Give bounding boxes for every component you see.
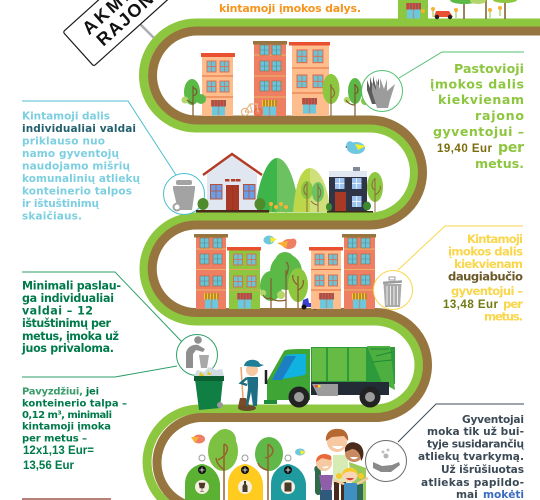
text: variable fee per apartment resident: gyventojui –	[451, 284, 523, 298]
garbage truck	[264, 346, 395, 408]
text: fixed fee per resident: metus.	[475, 156, 524, 171]
icon: gloves	[362, 70, 402, 112]
row 2: dark house	[326, 167, 373, 212]
text: example calculation: 13,56 Eur	[23, 460, 75, 472]
text: variable fee for individual household: komunalinių atliekų	[22, 173, 141, 185]
row 2: white house	[196, 154, 269, 212]
text: variable fee per apartment resident: per	[503, 297, 523, 311]
text: minimal service: ištuštinimų per	[22, 317, 112, 330]
text: residents pay for household waste only: Gyventojai	[462, 414, 524, 426]
text: fixed fee per resident: per	[498, 140, 524, 156]
text: minimal service	[21, 280, 121, 355]
text: variable fee for individual household: individualiai valdai	[22, 123, 136, 135]
recycling bin: green, glass	[185, 455, 220, 500]
row 1 buildings	[201, 41, 330, 116]
text: variable fee for individual household: konteinerio talpos	[22, 186, 132, 198]
row 1 trees	[182, 74, 369, 116]
blue scooter	[302, 298, 320, 310]
family	[314, 429, 368, 500]
text: variable fee for individual household: priklauso nuo	[22, 136, 105, 148]
text: residents pay for household waste only: atliekas papildo-	[421, 477, 524, 489]
text: variable fee for individual household: namo gyventojų	[22, 148, 120, 160]
text: variable fee per apartment resident: kiekvienam	[454, 257, 523, 271]
text: residents pay for household waste only: atliekų tvarkymą.	[418, 451, 524, 463]
text: fixed fee per resident: įmokos dalis	[430, 76, 524, 92]
text: example calculation: per metus –	[22, 434, 87, 444]
callout line: sorted waste	[398, 404, 524, 442]
bicycle	[241, 104, 262, 116]
text: fixed fee per resident	[430, 61, 524, 171]
row 3: right buildings	[309, 234, 376, 309]
road: winding green and brown band	[144, 23, 540, 500]
row 3: tree cluster	[260, 252, 308, 308]
text: fixed fee per resident: gyventojui –	[433, 124, 524, 139]
text: residents pay for household waste only: Už išrūšiuotas	[441, 464, 524, 476]
worker with broom	[238, 360, 264, 411]
red bird	[191, 434, 205, 444]
recycling bin: teal, paper	[271, 455, 306, 500]
text: minimal service: ga individualiai	[22, 292, 114, 305]
text: minimal service: Minimali paslau-	[22, 280, 121, 292]
recycling bin: yellow, plastic	[228, 455, 263, 500]
callout line: fixed fee	[399, 52, 524, 78]
callout line: apartment resident	[398, 226, 523, 270]
row 2: hills	[255, 158, 330, 212]
text: fixed fee per resident: kiekvienam	[438, 92, 524, 107]
text: residents pay for household waste only: tyje susidarančių	[427, 438, 524, 450]
text: variable fee for individual household: Kintamoji dalis	[22, 110, 110, 122]
text: variable fee for individual household	[22, 110, 141, 222]
text: fixed fee per resident: 19,40 Eur	[437, 143, 493, 155]
text: variable fee per apartment resident	[443, 232, 523, 324]
row 2: flowers	[269, 202, 288, 215]
clipped bar at bottom	[22, 498, 111, 500]
text: minimal service: valdai – 12	[22, 304, 93, 318]
callout lines: minimal service and example	[22, 272, 182, 377]
small blue bird	[295, 448, 306, 456]
text: fixed fee per resident: rajono	[475, 108, 524, 123]
text: variable fee per apartment resident: įmokos dalis	[448, 244, 523, 258]
text: example calculation: 0,12 m³, minimali	[22, 410, 112, 421]
text: residents pay for household waste only	[418, 414, 524, 500]
top right scene: building, scooter, trees	[398, 0, 517, 19]
callout line: individual household	[22, 101, 176, 175]
top heading fragment: kintamoji įmokos dalys.	[219, 2, 361, 15]
green wheelie bin with rubbish	[194, 367, 224, 410]
text: variable fee for individual household: naudojamo mišrių	[22, 160, 131, 172]
road sign: Akmenės rajonas	[63, 0, 198, 66]
text: fixed fee per resident: Pastovioji	[454, 61, 524, 76]
text: example calculation	[22, 386, 127, 472]
row 5: trees	[208, 429, 283, 500]
icon: blue bird	[345, 141, 366, 154]
sign post	[140, 24, 154, 38]
icon: hand with drops	[366, 440, 406, 482]
text: minimal service: metus, įmoka už	[22, 330, 119, 343]
text: minimal service: juos privaloma.	[21, 342, 114, 355]
icon: birds pair	[264, 236, 296, 249]
text: example calculation: konteinerio talpa –	[22, 398, 127, 410]
text: variable fee per apartment resident: metus.	[484, 310, 523, 324]
text: residents pay for household waste only: moka tik už bui-	[427, 426, 524, 438]
row 3: left buildings	[194, 234, 261, 309]
text: example calculation: kintamoji įmoka	[22, 422, 111, 432]
text: variable fee per apartment resident: daugiabučio	[448, 270, 523, 284]
icon: wheeled bin	[164, 174, 204, 214]
icon: trash can	[374, 270, 412, 310]
text: variable fee per apartment resident: 13,48 Eur	[443, 299, 499, 311]
text: variable fee per apartment resident: Kintamoji	[467, 232, 523, 246]
text: variable fee for individual household: ir ištuštinimų	[22, 198, 100, 210]
icon: person throwing rubbish	[176, 334, 218, 376]
text: example calculation: Pavyzdžiui, jei	[22, 386, 99, 398]
row 2: small trees	[301, 181, 324, 212]
text: example calculation: 12x1,13 Eur=	[23, 445, 94, 457]
text: variable fee for individual household: skaičiaus.	[22, 210, 82, 222]
row 2: right tree	[367, 172, 383, 212]
